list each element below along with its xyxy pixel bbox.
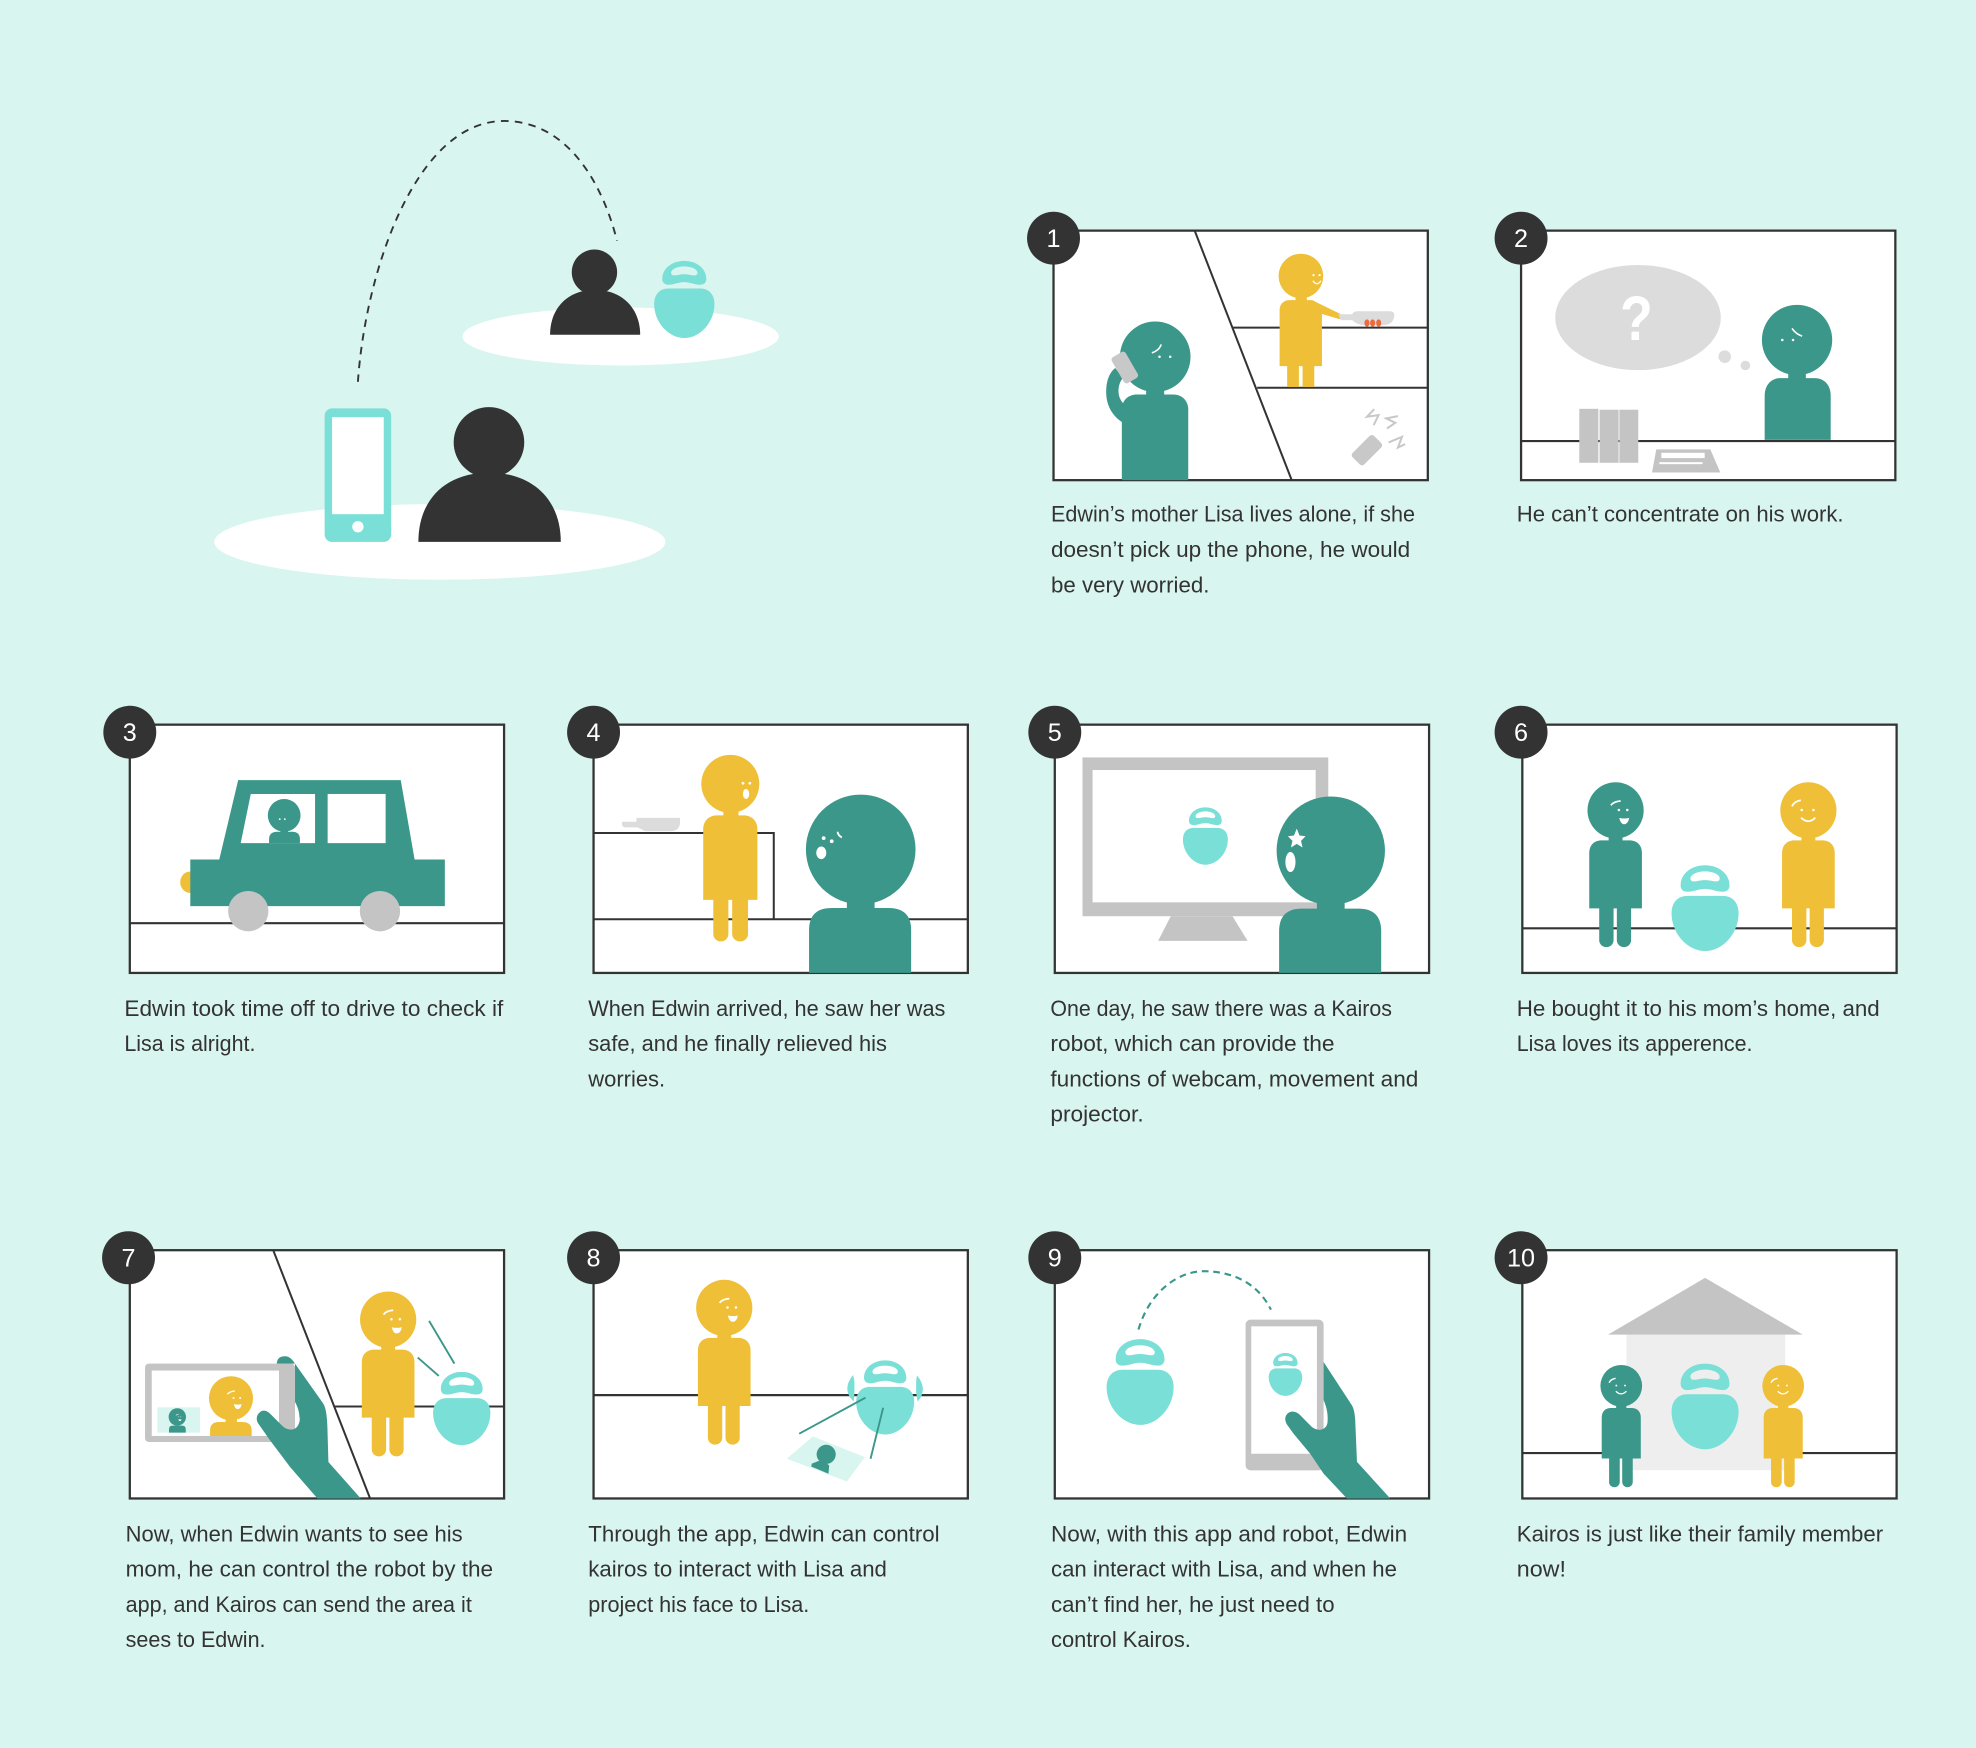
ringing phone on the floor bbox=[1350, 409, 1405, 467]
panel 6: robot at mom's home bbox=[1495, 706, 1897, 1056]
badge 6 bbox=[1495, 706, 1548, 759]
caption 9: can interact with Lisa, and when he bbox=[1051, 1557, 1397, 1582]
frame bbox=[1055, 1250, 1429, 1498]
panel 9: app and robot bbox=[1028, 1231, 1429, 1652]
badge 7: 7 bbox=[122, 1245, 136, 1273]
scene lines bbox=[1195, 231, 1428, 480]
frame bbox=[594, 725, 968, 973]
hand holding phone bbox=[1285, 1362, 1390, 1498]
caption 6 bbox=[1517, 996, 1880, 1056]
Lisa bbox=[696, 1280, 752, 1445]
Edwin bbox=[1587, 782, 1644, 947]
caption 5: One day, he saw there was a Kairos bbox=[1050, 996, 1392, 1021]
frame bbox=[594, 1250, 968, 1498]
Lisa bbox=[1762, 1365, 1804, 1487]
frying pan with flames bbox=[1338, 311, 1394, 327]
counter and floor lines bbox=[594, 833, 968, 919]
caption 4: worries. bbox=[587, 1066, 665, 1091]
frame bbox=[1522, 1250, 1897, 1498]
icon: smartphone bbox=[325, 408, 391, 542]
Edwin with star-struck eye bbox=[1277, 796, 1385, 973]
badge 5 bbox=[1028, 706, 1081, 759]
platform: lower white ellipse bbox=[214, 504, 665, 580]
caption 10: now! bbox=[1517, 1557, 1566, 1582]
badge 5: 5 bbox=[1048, 719, 1062, 747]
Kairos robot bbox=[1107, 1339, 1174, 1425]
dashed teal arc bbox=[1138, 1271, 1271, 1330]
floor line bbox=[1522, 1452, 1897, 1454]
car bbox=[180, 780, 445, 931]
projected image of Edwin bbox=[787, 1436, 865, 1481]
badge 3: 3 bbox=[123, 719, 137, 747]
frame bbox=[130, 725, 504, 973]
caption 7: sees to Edwin. bbox=[126, 1627, 266, 1652]
panel 7: remote control via tablet bbox=[102, 1231, 504, 1652]
caption 5: projector. bbox=[1050, 1102, 1144, 1127]
caption 7: app, and Kairos can send the area it bbox=[126, 1592, 472, 1617]
Edwin bbox=[1600, 1365, 1642, 1487]
panel 5: sees the Kairos robot bbox=[1028, 706, 1429, 1127]
caption 5: functions of webcam, movement and bbox=[1050, 1066, 1418, 1091]
pan on counter bbox=[622, 818, 680, 831]
robot sensing Lisa bbox=[418, 1321, 490, 1445]
projection beams bbox=[799, 1398, 883, 1459]
caption 5 bbox=[1050, 996, 1418, 1127]
divider and floor lines bbox=[273, 1250, 504, 1498]
caption 7: Now, when Edwin wants to see his bbox=[126, 1521, 463, 1546]
caption 1: doesn’t pick up the phone, he would bbox=[1051, 537, 1410, 562]
Lisa cooking bbox=[1279, 254, 1342, 387]
phone with robot on screen bbox=[1246, 1320, 1324, 1470]
badge 6: 6 bbox=[1514, 719, 1528, 747]
desk line bbox=[1521, 440, 1895, 442]
caption 1: be very worried. bbox=[1051, 572, 1209, 597]
badge 10 bbox=[1495, 1231, 1548, 1284]
caption 8: project his face to Lisa. bbox=[588, 1592, 809, 1617]
phone held to ear bbox=[1110, 351, 1139, 385]
caption 3: Edwin took time off to drive to check if bbox=[124, 996, 504, 1021]
caption 9 bbox=[1051, 1521, 1407, 1652]
badge 4 bbox=[567, 706, 620, 759]
badge 8 bbox=[567, 1231, 620, 1284]
icon: Kairos robot bbox=[654, 261, 714, 338]
badge 1: 1 bbox=[1047, 225, 1061, 253]
icon: large person silhouette bbox=[418, 407, 561, 542]
caption 4: safe, and he finally relieved his bbox=[588, 1031, 887, 1056]
books bbox=[1579, 409, 1638, 463]
badge 7 bbox=[102, 1231, 155, 1284]
badge 3 bbox=[103, 706, 156, 759]
panel 3: driving to check bbox=[103, 706, 504, 1056]
Edwin thinking bbox=[1762, 305, 1832, 440]
tablet with video bbox=[145, 1364, 295, 1442]
badge 9 bbox=[1028, 1231, 1081, 1284]
caption 4 bbox=[587, 996, 945, 1091]
Lisa bbox=[360, 1292, 416, 1456]
caption 6: Lisa loves its apperence. bbox=[1517, 1031, 1752, 1056]
badge 8: 8 bbox=[587, 1245, 601, 1273]
Edwin close-up bbox=[806, 795, 916, 973]
robot on screen bbox=[1183, 807, 1228, 865]
badge 2: 2 bbox=[1514, 225, 1528, 253]
caption 7: mom, he can control the robot by the bbox=[126, 1557, 493, 1582]
thought bubble: ? bbox=[1620, 284, 1653, 354]
caption 6: He bought it to his mom’s home, and bbox=[1517, 996, 1880, 1021]
badge 4: 4 bbox=[587, 719, 601, 747]
caption 3: Lisa is alright. bbox=[124, 1031, 255, 1056]
caption 9: can’t find her, he just need to bbox=[1051, 1592, 1335, 1617]
thought bubble bbox=[1555, 265, 1750, 370]
hero illustration: phone call between Edwin and Lisa bbox=[214, 121, 779, 580]
caption 3 bbox=[124, 996, 504, 1056]
badge 2 bbox=[1495, 212, 1548, 265]
Lisa bbox=[1780, 782, 1836, 947]
hand holding tablet bbox=[257, 1356, 361, 1498]
caption 2: He can’t concentrate on his work. bbox=[1517, 502, 1844, 527]
caption 10: Kairos is just like their family member bbox=[1517, 1521, 1883, 1546]
frame bbox=[1521, 231, 1895, 480]
caption 4: When Edwin arrived, he saw her was bbox=[588, 996, 945, 1021]
house bbox=[1608, 1278, 1803, 1470]
panel 8: projecting his face bbox=[567, 1231, 968, 1617]
panel 10: family member bbox=[1495, 1231, 1897, 1582]
badge 10: 10 bbox=[1507, 1245, 1535, 1273]
Edwin calling bbox=[1106, 321, 1191, 480]
Kairos robot bbox=[1672, 865, 1739, 951]
floor line bbox=[594, 1394, 968, 1396]
panel 1: phone call unanswered bbox=[1027, 212, 1428, 597]
floor line bbox=[1522, 927, 1897, 929]
robot with raised arms bbox=[847, 1360, 923, 1434]
Lisa surprised bbox=[701, 755, 759, 941]
caption 5: robot, which can provide the bbox=[1050, 1031, 1335, 1056]
road line bbox=[130, 922, 504, 924]
caption 7 bbox=[126, 1521, 493, 1652]
platform: upper white ellipse bbox=[462, 308, 779, 365]
panel 4: relieved on arrival bbox=[567, 706, 968, 1091]
badge 1 bbox=[1027, 212, 1080, 265]
panel 2: cannot concentrate bbox=[1495, 212, 1895, 527]
caption 1 bbox=[1051, 502, 1415, 597]
icon: small person silhouette bbox=[550, 250, 640, 335]
caption 8 bbox=[588, 1521, 940, 1617]
frame bbox=[1054, 231, 1428, 480]
caption 8: kairos to interact with Lisa and bbox=[588, 1557, 887, 1582]
Kairos robot bbox=[1672, 1364, 1739, 1449]
monitor bbox=[1083, 757, 1328, 941]
caption 1: Edwin’s mother Lisa lives alone, if she bbox=[1051, 502, 1415, 527]
frame bbox=[1055, 725, 1429, 973]
dashed connection arc bbox=[358, 121, 617, 382]
caption 9: Now, with this app and robot, Edwin bbox=[1051, 1521, 1407, 1546]
badge 9: 9 bbox=[1048, 1245, 1062, 1273]
caption 8: Through the app, Edwin can control bbox=[588, 1521, 940, 1546]
laptop bbox=[1652, 449, 1720, 472]
frame bbox=[1522, 725, 1897, 973]
caption 10 bbox=[1517, 1521, 1883, 1582]
caption 9: control Kairos. bbox=[1051, 1627, 1191, 1652]
frame bbox=[130, 1250, 504, 1498]
